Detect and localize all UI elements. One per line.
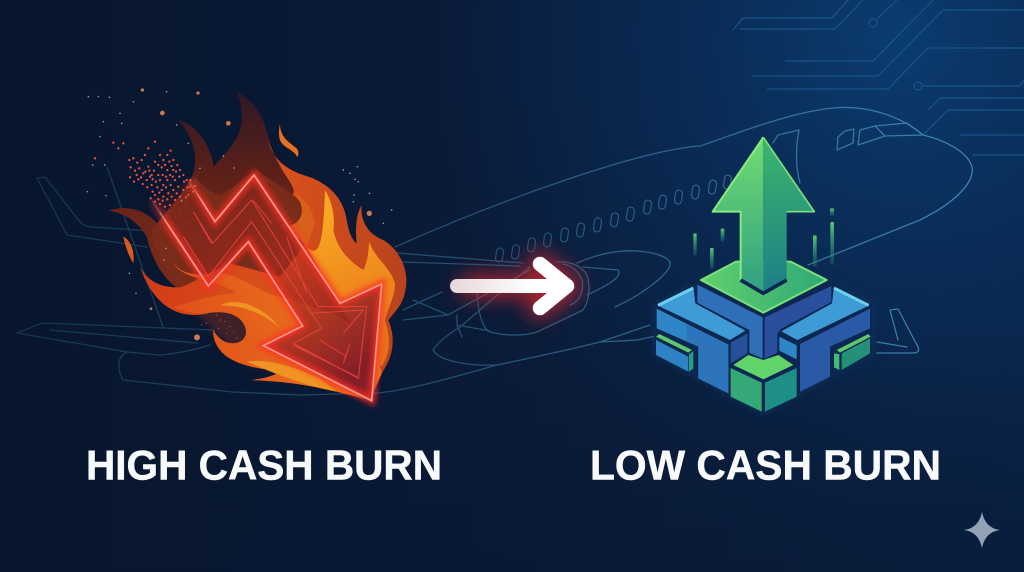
left face shade (687, 324, 728, 393)
small flame lick top (279, 124, 298, 157)
fuselage (377, 107, 972, 393)
inner right (779, 337, 797, 359)
left top (657, 287, 745, 340)
small flame lick left (123, 237, 134, 263)
arrow fill (152, 175, 382, 401)
ember dots (141, 88, 372, 340)
icon: sparkle watermark (964, 512, 1000, 548)
airplane outline (17, 107, 972, 395)
arrow outer glow (152, 175, 382, 401)
block glow (655, 253, 872, 413)
rear tail and stabilizers (37, 167, 167, 327)
upper left face (697, 285, 763, 359)
yellow lower wisp (220, 302, 337, 392)
arrow neon core (160, 175, 382, 401)
cabin windows (495, 175, 732, 262)
cockpit windows (773, 123, 923, 183)
front green block (731, 355, 797, 412)
particles red (95, 142, 195, 207)
brown center of flame (152, 170, 308, 287)
left top highlight (658, 288, 693, 305)
inner left (731, 333, 747, 363)
orange tongue (287, 193, 315, 247)
lower orange flame (173, 262, 382, 400)
right fin (877, 309, 919, 353)
green platform (701, 262, 827, 313)
particles grey (87, 92, 392, 293)
back flame (108, 92, 310, 290)
transition arrow (450, 263, 570, 308)
right top highlight (834, 288, 869, 305)
right small block (834, 334, 871, 370)
block silhouette (654, 260, 873, 415)
circuit lines top right (733, 0, 1024, 155)
arrow shaft (450, 279, 566, 293)
heading: high cash burn: HIGH CASH BURN (86, 442, 442, 488)
glowing arrow (152, 175, 382, 401)
icon: green arrow on blue blocks (654, 137, 873, 415)
rising ticks (693, 208, 834, 269)
left face (657, 309, 728, 393)
arrow neon edge (152, 175, 382, 401)
left small block (656, 334, 693, 372)
arrow head (540, 264, 567, 308)
arrow glow (470, 263, 570, 308)
right top (781, 287, 869, 340)
arrow inner lines (183, 200, 367, 378)
yellow flame right (307, 190, 395, 367)
heading: low cash burn: LOW CASH BURN (590, 442, 941, 488)
near wing and engine (397, 251, 707, 365)
right face (800, 309, 870, 392)
icon: burning downward arrow (87, 88, 406, 401)
far wing (17, 323, 377, 395)
upper right face (765, 286, 831, 359)
flame glow (180, 180, 380, 400)
green up arrow (713, 137, 814, 293)
main flame (140, 140, 406, 400)
particles fine (160, 207, 237, 338)
